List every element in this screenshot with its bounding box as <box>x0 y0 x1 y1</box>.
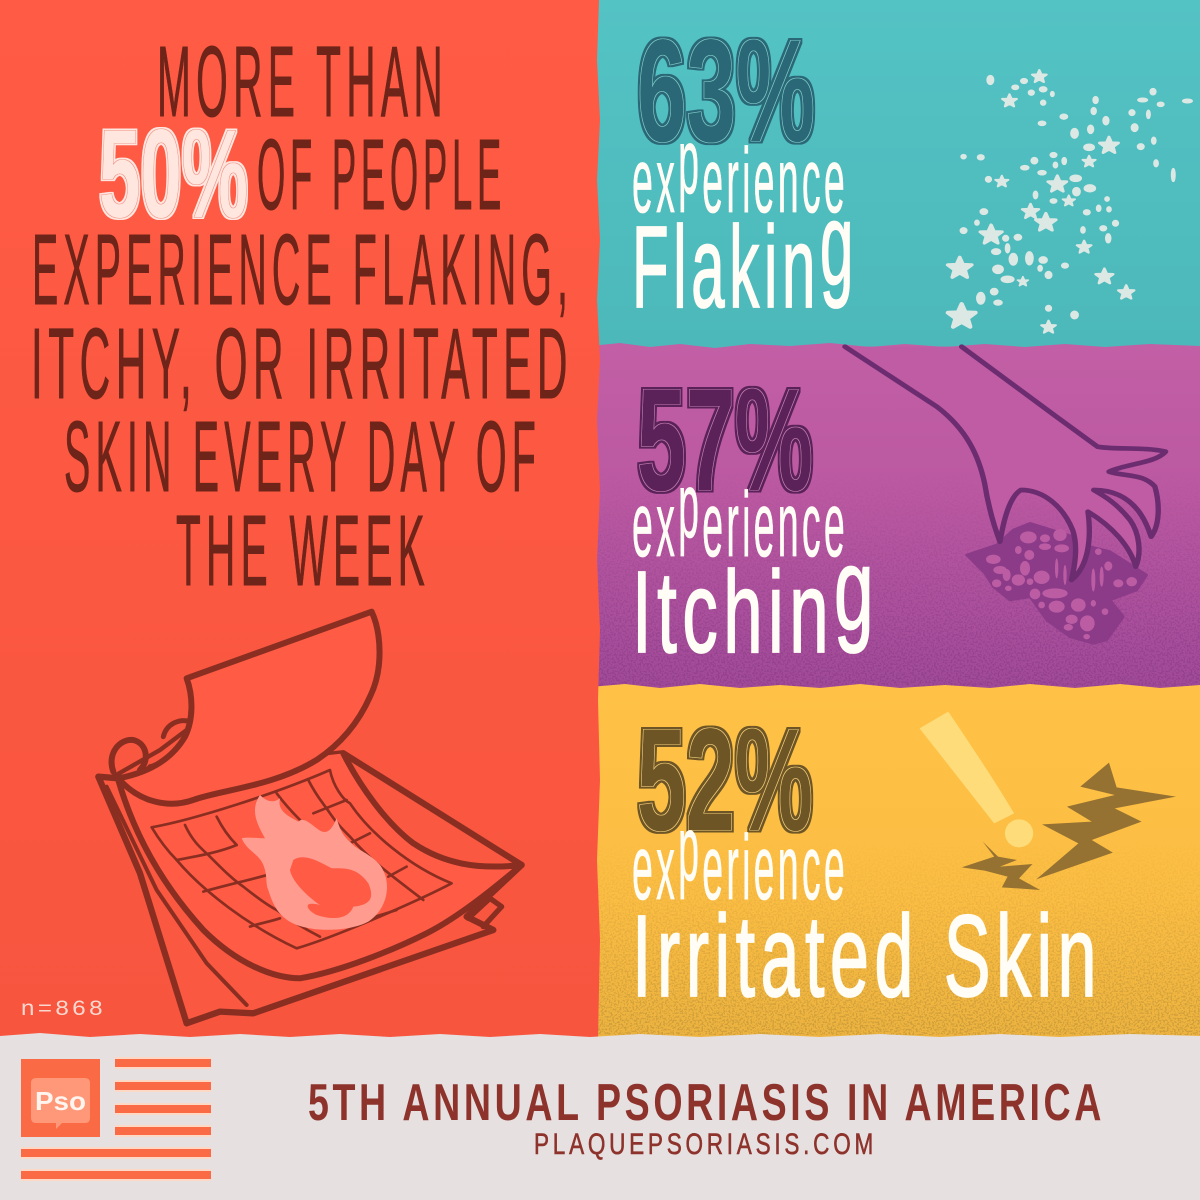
icon: exclamation mark <box>920 712 1033 847</box>
panel: headline and calendar: OF PEOPLE <box>257 119 506 231</box>
icon: skin flakes and stars <box>948 70 1192 333</box>
panel: irritated skin <box>590 684 1200 1040</box>
panel: irritated skin: erience <box>702 817 848 919</box>
icon: lightning bolts <box>962 763 1176 890</box>
panel: flaking <box>590 0 1200 350</box>
headline: THE WEEK <box>176 495 430 607</box>
panel: headline and calendar <box>0 0 600 1040</box>
label: experience: ex <box>632 817 745 919</box>
label: experience: p <box>678 798 702 900</box>
percentage: 63%: 63% <box>637 9 815 172</box>
sample size note: n=868 <box>21 997 106 1020</box>
percentage: 52%: 52% <box>637 698 813 861</box>
label: Flaking: Flakin <box>632 202 995 332</box>
panel: itching: erience <box>702 474 848 576</box>
icon: Pso flag logo <box>21 1057 211 1181</box>
percentage: 57%: 57% <box>637 358 813 521</box>
label: Itching: Itchin <box>632 547 963 677</box>
label: Flaking: g <box>820 179 858 309</box>
label: experience: ex <box>632 474 745 576</box>
panel: itching <box>590 343 1200 690</box>
footer band <box>0 1033 1200 1200</box>
footer website: PLAQUEPSORIASIS.COM <box>534 1128 877 1161</box>
label: experience: p <box>678 455 702 557</box>
icon: scratching hand <box>845 347 1166 580</box>
highlighted figure: 50%: 50% <box>99 105 248 244</box>
label: experience: p <box>678 111 702 213</box>
panel: flaking: erience <box>702 130 848 232</box>
label: Itching: g <box>834 524 879 654</box>
headline <box>31 26 573 607</box>
icon: burning calendar <box>98 612 522 1023</box>
label: experience: ex <box>632 130 745 232</box>
icon: Pso flag logo: Pso <box>35 1086 86 1116</box>
headline: MORE THAN <box>157 26 448 138</box>
icon: skin plaque <box>967 523 1147 643</box>
